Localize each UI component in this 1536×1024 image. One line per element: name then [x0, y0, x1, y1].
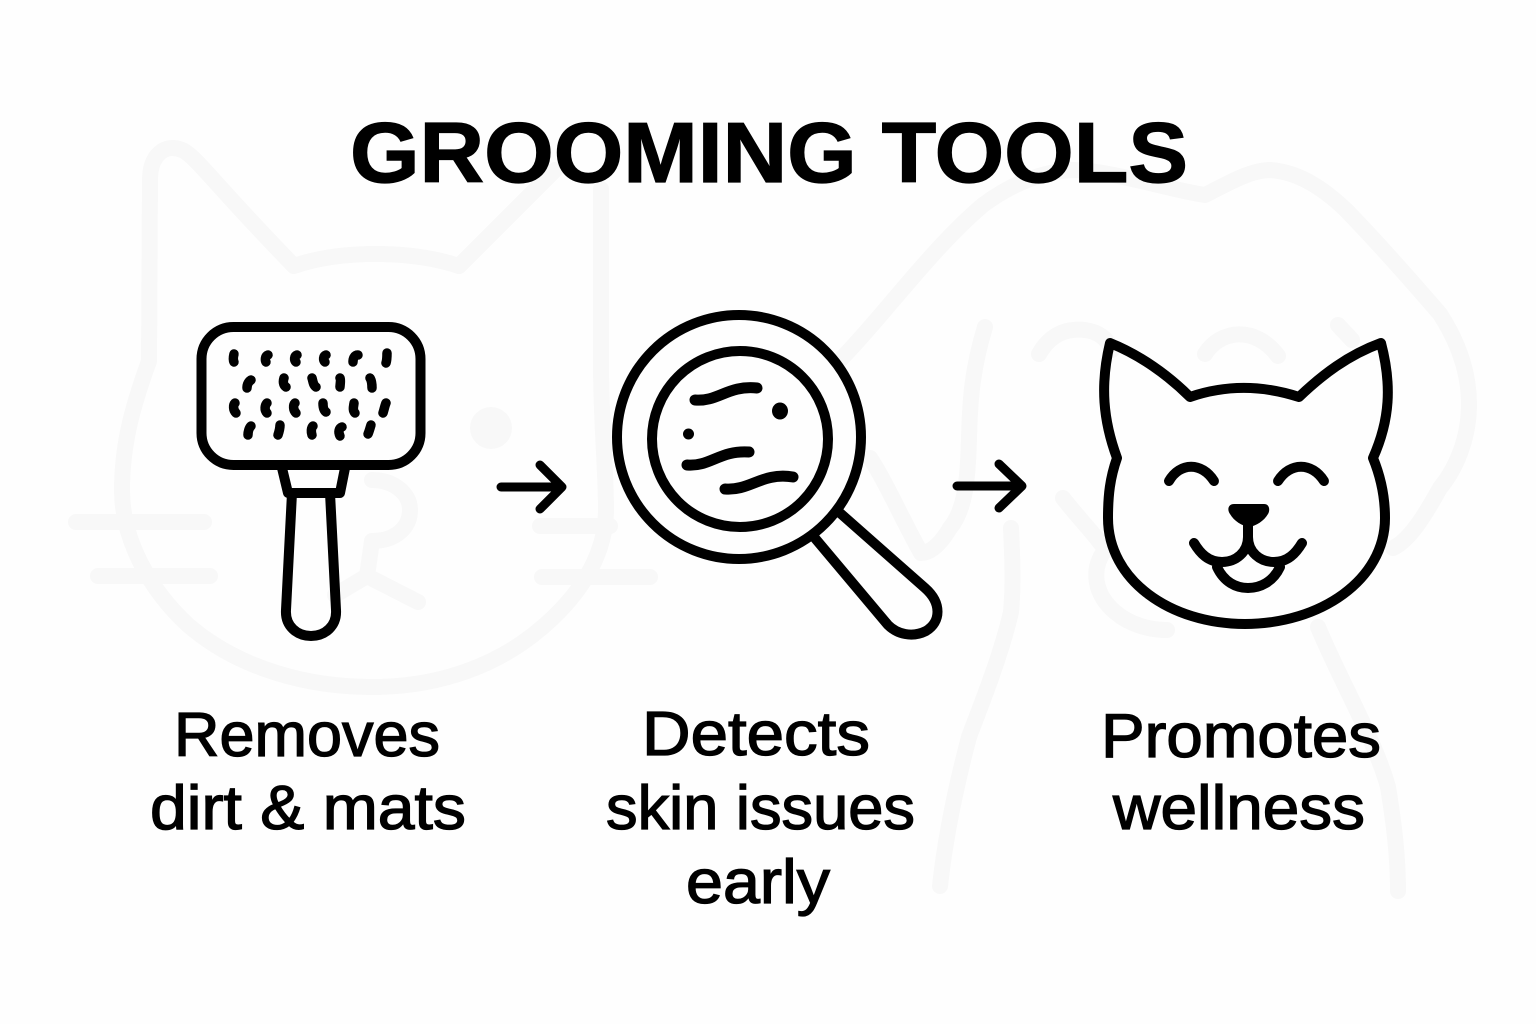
arrow: brush to magnifier: [501, 465, 562, 509]
brush bristles: [233, 353, 387, 436]
icon: happy cat face: [1104, 343, 1388, 624]
cat mouth: [1194, 525, 1302, 562]
label: detects skin issues early: Detects: [642, 700, 870, 769]
label: promotes wellness: wellness: [1112, 774, 1365, 843]
icon: magnifying glass: [617, 315, 938, 635]
skin wave marks: [695, 388, 757, 400]
label: detects skin issues early: [606, 700, 915, 917]
watermark: animal outline right: [841, 170, 1469, 891]
icon: slicker brush: [202, 327, 420, 636]
label: promotes wellness: Promotes: [1101, 702, 1381, 771]
label: promotes wellness: [1101, 702, 1381, 843]
label: removes dirt and mats: dirt & mats: [150, 774, 466, 843]
label: removes dirt and mats: Removes: [174, 701, 440, 770]
watermark: cat outline left: [76, 148, 650, 687]
cat nose: [1228, 504, 1269, 527]
title: GROOMING TOOLS: [350, 106, 1188, 201]
cat eyes: [1169, 467, 1214, 481]
skin spots: [772, 402, 788, 420]
label: removes dirt and mats: [150, 701, 466, 843]
label: detects skin issues early: skin issues: [606, 774, 915, 843]
arrow: magnifier to cat: [957, 464, 1022, 508]
label: detects skin issues early: early: [686, 848, 830, 917]
